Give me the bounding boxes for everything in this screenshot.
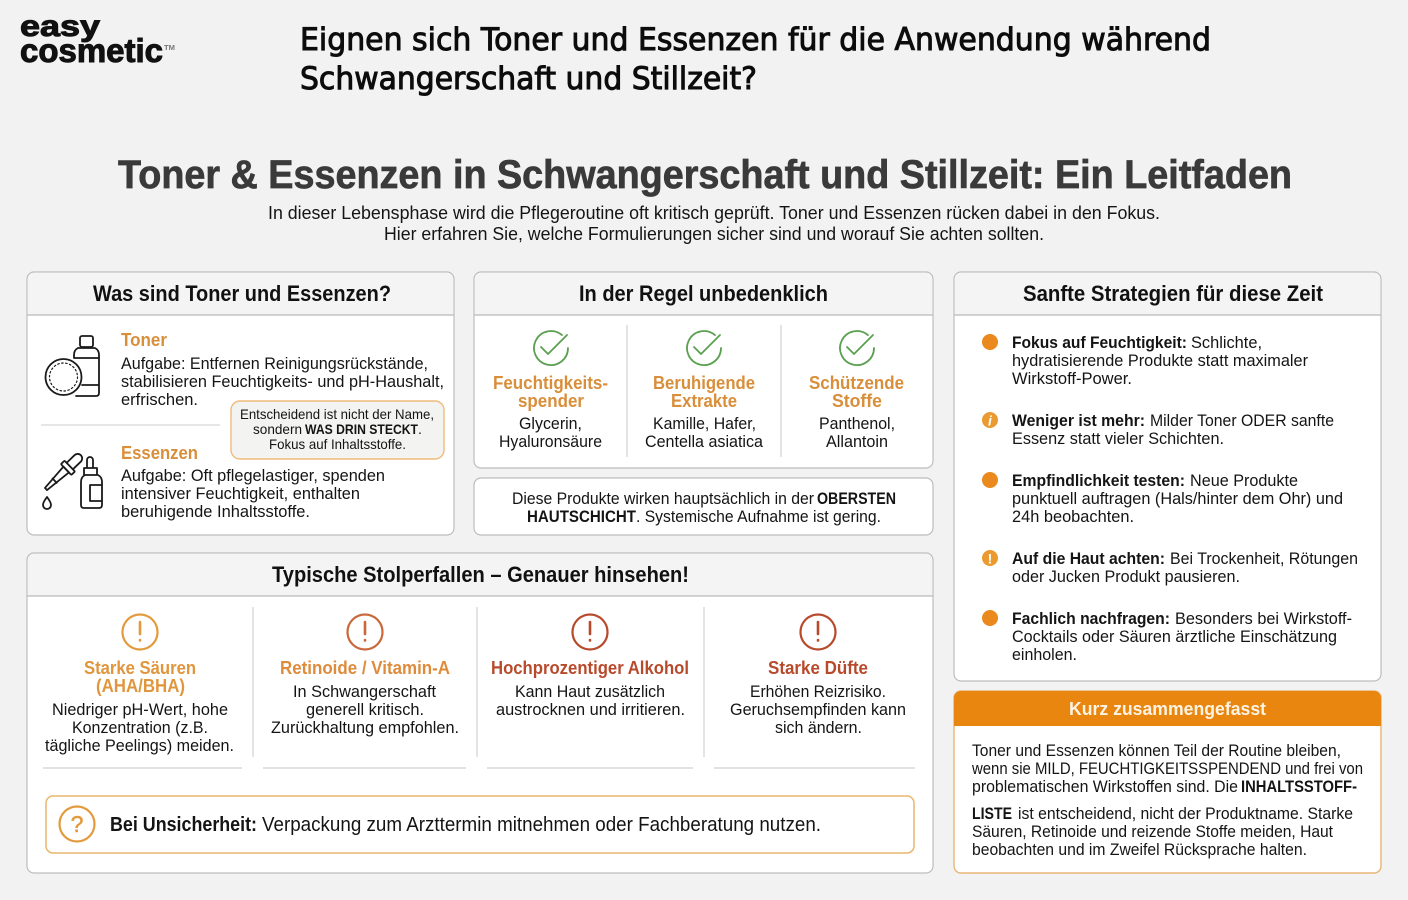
icon: warning	[572, 614, 608, 650]
summary text: Säuren, Retinoide und reizende Stoffe meiden, Haut	[972, 822, 1333, 841]
icon: warning	[348, 614, 382, 650]
column: Feuchtigkeitsspender: Hyaluronsäure	[499, 432, 602, 451]
pitfall: Alkohol: Kann Haut zusätzlich	[515, 682, 665, 701]
icon: warning	[982, 550, 998, 566]
panel: Typische Stolperfallen	[27, 553, 933, 873]
panel: Sanfte Strategien	[954, 272, 1381, 681]
pitfall: Düfte: sich ändern.	[775, 718, 862, 737]
icon: warning	[800, 614, 836, 650]
icon: question	[60, 806, 94, 842]
column: Feuchtigkeitsspender: Feuchtigkeits-	[493, 373, 608, 393]
logo: easy cosmetic: easy	[20, 10, 100, 43]
column: Beruhigende Extrakte: Beruhigende	[653, 373, 755, 393]
panel: note on skin layer: OBERSTEN	[817, 489, 896, 508]
strategy: Weniger ist mehr: Milder Toner ODER sanfte	[1150, 411, 1334, 430]
icon: question: ?	[71, 811, 83, 837]
panel: In der Regel unbedenklich	[474, 272, 933, 468]
intro text	[268, 203, 1160, 244]
strategy: Haut achten: Auf die Haut achten:	[1012, 549, 1165, 568]
column: Schützende Stoffe: Panthenol,	[819, 414, 895, 433]
pitfall: Düfte	[730, 614, 906, 737]
strategy: Weniger ist mehr	[982, 411, 1334, 448]
strategy: Empfindlichkeit: 24h beobachten.	[1012, 507, 1134, 526]
callout: name vs content	[231, 401, 444, 459]
icon: check	[687, 331, 721, 365]
icon: dot	[982, 334, 998, 350]
summary text: INHALTSSTOFF-	[1241, 777, 1357, 796]
pitfall: Starke Säuren: Niedriger pH-Wert, hohe	[52, 700, 228, 719]
strategy: Weniger ist mehr: Essenz statt vieler Schichten.	[1012, 429, 1224, 448]
panel: note on skin layer: . Systemische Aufnahme ist gering.	[636, 507, 881, 526]
pitfall: Alkohol	[491, 614, 689, 719]
icon: info	[982, 412, 998, 428]
column: Beruhigende Extrakte	[645, 331, 764, 451]
pitfall: Starke Säuren: Starke Säuren	[84, 658, 196, 678]
strategy: Fachlich nachfragen: Besonders bei Wirkstoff-	[1175, 609, 1352, 628]
heading: Kurz zusammengefasst	[1069, 699, 1266, 719]
question headline: Schwangerschaft und Stillzeit?	[300, 61, 757, 97]
pitfall: Starke Säuren: (AHA/BHA)	[96, 676, 185, 696]
toner description	[121, 354, 444, 409]
pitfall: Starke Säuren	[45, 614, 234, 755]
callout: name vs content: Entscheidend ist nicht der Name,	[240, 406, 434, 422]
pitfall: Starke Säuren: tägliche Peelings) meiden.	[45, 736, 234, 755]
panel: Was sind Toner und Essenzen	[27, 272, 454, 535]
toner label: Toner	[121, 330, 167, 350]
strategy: Feuchtigkeit: Fokus auf Feuchtigkeit:	[1012, 333, 1187, 352]
strategy: Feuchtigkeit	[982, 333, 1308, 388]
strategy: Fachlich nachfragen: Cocktails oder Säuren ärztliche Einschätzung	[1012, 627, 1337, 646]
main title: Toner & Essenzen in Schwangerschaft und Stillzeit: Ein Leitfaden	[118, 153, 1292, 197]
panel: note on skin layer	[474, 478, 933, 535]
logo: easy cosmetic: cosmetic	[20, 32, 163, 69]
strategy: Haut achten	[982, 549, 1358, 586]
strategy: Empfindlichkeit: punktuell auftragen (Hals/hinter dem Ohr) und	[1012, 489, 1343, 508]
column: Beruhigende Extrakte: Extrakte	[671, 391, 737, 411]
essenzen description: intensiver Feuchtigkeit, enthalten	[121, 484, 360, 503]
callout: Bei Unsicherheit	[46, 796, 914, 853]
callout: name vs content: Fokus auf Inhaltsstoffe.	[269, 436, 406, 452]
icon: check	[840, 331, 874, 365]
icon: toner bottle and pad	[46, 336, 99, 396]
icon: dot	[982, 610, 998, 626]
question headline: Eignen sich Toner und Essenzen für die Anwendung während	[300, 22, 1211, 58]
strategy: Weniger ist mehr: Weniger ist mehr:	[1012, 411, 1145, 430]
essenzen description: Aufgabe: Oft pflegelastiger, spenden	[121, 466, 385, 485]
pitfall: Düfte: Starke Düfte	[768, 658, 868, 678]
essenzen description: beruhigende Inhaltsstoffe.	[121, 502, 310, 521]
callout: Bei Unsicherheit: Bei Unsicherheit:	[110, 814, 257, 836]
logo: easy cosmetic: TM	[164, 45, 175, 52]
summary text: wenn sie MILD, FEUCHTIGKEITSSPENDEND und frei von	[971, 759, 1363, 778]
summary text: Toner und Essenzen können Teil der Routine bleiben,	[972, 741, 1341, 760]
icon: warning: !	[988, 550, 992, 566]
pitfall: Starke Säuren: Konzentration (z.B.	[72, 718, 208, 737]
column: Schützende Stoffe	[809, 331, 904, 451]
pitfall: Alkohol: Hochprozentiger Alkohol	[491, 658, 689, 678]
callout: Bei Unsicherheit: Verpackung zum Arzttermin mitnehmen oder Fachberatung nutzen.	[262, 814, 821, 836]
question headline	[300, 22, 1211, 97]
pitfall: Retinoide: In Schwangerschaft	[293, 682, 436, 701]
pitfall: Retinoide: Retinoide / Vitamin-A	[280, 658, 450, 678]
summary text: ist entscheidend, nicht der Produktname. Starke	[1018, 804, 1353, 823]
pitfall: Retinoide	[271, 614, 459, 737]
essenzen description	[121, 466, 385, 521]
callout: name vs content: sondern	[253, 421, 302, 437]
pitfall: Düfte: Geruchsempfinden kann	[730, 700, 906, 719]
toner description: erfrischen.	[121, 390, 198, 409]
summary text: problematischen Wirkstoffen sind. Die	[972, 777, 1238, 796]
heading: Sanfte Strategien für diese Zeit	[1023, 281, 1324, 306]
heading: Typische Stolperfallen – Genauer hinsehen!	[272, 562, 689, 587]
icon: info: i	[988, 412, 993, 428]
callout: name vs content: WAS DRIN STECKT	[305, 421, 418, 437]
column: Feuchtigkeitsspender: Glycerin,	[519, 414, 582, 433]
strategy: Fachlich nachfragen	[982, 609, 1352, 664]
intro text: Hier erfahren Sie, welche Formulierungen sicher sind und worauf Sie achten sollten.	[384, 224, 1044, 244]
icon: check	[534, 331, 568, 365]
toner description: stabilisieren Feuchtigkeits- und pH-Haushalt,	[121, 372, 444, 391]
strategy: Feuchtigkeit: hydratisierende Produkte statt maximaler	[1012, 351, 1308, 370]
strategy: Feuchtigkeit: Wirkstoff-Power.	[1012, 369, 1132, 388]
column: Schützende Stoffe: Stoffe	[832, 391, 882, 411]
strategy: Empfindlichkeit	[982, 471, 1343, 526]
strategy: Haut achten: Bei Trockenheit, Rötungen	[1170, 549, 1358, 568]
pitfall: Alkohol: austrocknen und irritieren.	[496, 700, 685, 719]
panel: note on skin layer: HAUTSCHICHT	[527, 507, 637, 526]
column: Feuchtigkeitsspender	[493, 331, 608, 451]
intro text: In dieser Lebensphase wird die Pflegeroutine oft kritisch geprüft. Toner und Essenzen rücken dabei in den Fokus.	[268, 203, 1160, 223]
strategy: Feuchtigkeit: Schlichte,	[1191, 333, 1262, 352]
pitfall: Düfte: Erhöhen Reizrisiko.	[750, 682, 886, 701]
strategy: Fachlich nachfragen: Fachlich nachfragen:	[1012, 609, 1170, 628]
pitfall: Retinoide: generell kritisch.	[306, 700, 424, 719]
panel: note on skin layer: Diese Produkte wirken hauptsächlich in der	[512, 489, 814, 508]
heading: Was sind Toner und Essenzen?	[93, 281, 391, 306]
summary text: beobachten und im Zweifel Rücksprache halten.	[972, 840, 1307, 859]
column: Beruhigende Extrakte: Kamille, Hafer,	[653, 414, 756, 433]
heading: In der Regel unbedenklich	[579, 281, 828, 306]
panel: Kurz zusammengefasst	[954, 691, 1381, 873]
column: Schützende Stoffe: Allantoin	[826, 432, 888, 451]
logo: easy cosmetic	[20, 10, 175, 69]
column: Schützende Stoffe: Schützende	[809, 373, 904, 393]
toner description: Aufgabe: Entfernen Reinigungsrückstände,	[121, 354, 428, 373]
icon: dropper and bottle	[41, 450, 102, 509]
pitfall: Retinoide: Zurückhaltung empfohlen.	[271, 718, 459, 737]
column: Feuchtigkeitsspender: spender	[518, 391, 584, 411]
strategy: Fachlich nachfragen: einholen.	[1012, 645, 1077, 664]
icon: dot	[982, 472, 998, 488]
icon: warning	[122, 614, 158, 650]
summary text	[971, 741, 1363, 859]
essenzen label: Essenzen	[121, 443, 198, 463]
strategy: Empfindlichkeit: Empfindlichkeit testen:	[1012, 471, 1185, 490]
summary text: LISTE	[972, 804, 1012, 823]
strategy: Empfindlichkeit: Neue Produkte	[1190, 471, 1298, 490]
callout: name vs content: .	[418, 421, 422, 437]
strategy: Haut achten: oder Jucken Produkt pausieren.	[1012, 567, 1240, 586]
column: Beruhigende Extrakte: Centella asiatica	[645, 432, 764, 451]
